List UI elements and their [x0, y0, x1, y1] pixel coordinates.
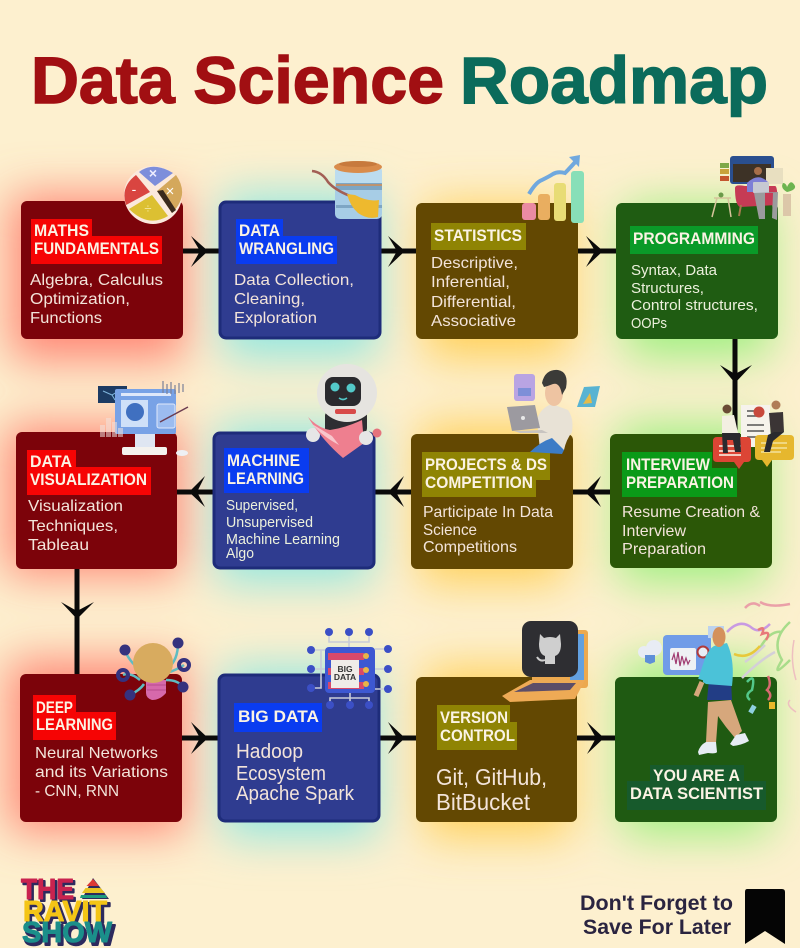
- save for later text: Don't Forget to: [580, 892, 733, 915]
- heading chip: MACHINE: [227, 452, 300, 470]
- body text: Optimization,: [30, 291, 130, 308]
- body text: [436, 764, 547, 815]
- heading chip: VERSION: [440, 709, 508, 727]
- body text: [423, 504, 553, 556]
- heading chip: [630, 226, 758, 254]
- body text: Unsupervised: [226, 514, 313, 531]
- body text: Resume Creation &: [622, 504, 760, 521]
- heading chip: YOU ARE A: [653, 767, 740, 785]
- heading chip: LEARNING: [227, 470, 304, 488]
- panel: machine learning: [214, 433, 374, 568]
- body text: Neural Networks: [35, 745, 158, 762]
- heading chip: [33, 695, 116, 740]
- heading chip: PROGRAMMING: [633, 230, 755, 248]
- heading chip: BIG DATA: [238, 708, 319, 726]
- body text: Descriptive,: [431, 255, 518, 272]
- heading chip: [234, 703, 322, 732]
- body text: [431, 255, 518, 330]
- heading chip: [431, 223, 526, 250]
- icon: big data server: BIG: [337, 664, 353, 674]
- heading chip: PREPARATION: [626, 474, 734, 492]
- panel: data visualization: [16, 432, 177, 569]
- body text: [226, 497, 340, 562]
- logo: The Ravit Show: [21, 874, 116, 948]
- panel: maths fundamentals: [21, 201, 183, 339]
- body text: Science: [423, 522, 477, 539]
- body text: [236, 741, 355, 805]
- panel: deep learning: [20, 674, 182, 822]
- body text: [28, 498, 123, 554]
- icon: big data server: [307, 628, 392, 709]
- body text: [234, 272, 354, 327]
- heading chip: CONTROL: [440, 727, 515, 745]
- heading chip: [622, 452, 737, 497]
- body text: - CNN, RNN: [35, 783, 119, 800]
- heading chip: [627, 765, 766, 810]
- body text: Interview: [622, 523, 686, 540]
- heading chip: [422, 452, 550, 497]
- body text: Participate In Data: [423, 504, 553, 521]
- body text: Algebra, Calculus: [30, 272, 163, 289]
- icon: neural bulb: [118, 638, 189, 700]
- heading chip: [31, 219, 162, 264]
- icon: maths pie: -: [132, 181, 137, 197]
- panel: you are a data scientist: [615, 677, 777, 822]
- icon: robot reading book: [306, 364, 382, 458]
- body text: Git, GitHub,: [436, 764, 547, 790]
- body text: Inferential,: [431, 274, 510, 291]
- body text: Control structures,: [631, 297, 758, 314]
- icon: programmer on chair: [712, 156, 795, 220]
- icon: growth chart: [522, 155, 584, 223]
- icon: maths pie: ÷: [144, 201, 152, 216]
- body text: Visualization: [28, 498, 123, 515]
- heading chip: FUNDAMENTALS: [34, 240, 159, 258]
- body text: [35, 745, 168, 800]
- panel: programming: [616, 203, 778, 339]
- logo: The Ravit Show: THE: [23, 876, 76, 908]
- body text: Machine Learning: [226, 531, 340, 548]
- body text: Cleaning,: [234, 291, 305, 308]
- panel: data wrangling: [220, 202, 380, 338]
- body text: Apache Spark: [236, 783, 355, 805]
- icon: data visualisation monitor: [98, 381, 188, 456]
- body text: Differential,: [431, 294, 516, 311]
- body text: and its Variations: [35, 764, 168, 781]
- body text: Tableau: [28, 537, 89, 554]
- icon: maths pie: ×: [149, 165, 157, 181]
- heading chip: [437, 705, 517, 750]
- body text: Syntax, Data: [631, 262, 718, 279]
- panel: projects and DS competition: [411, 434, 573, 569]
- body text: [622, 504, 760, 558]
- panel: statistics: [416, 203, 578, 339]
- title: Data Science: [31, 43, 444, 117]
- icon: maths pie: [124, 165, 182, 224]
- body text: Techniques,: [28, 518, 118, 535]
- panel: version control: [416, 677, 577, 822]
- icon: github laptop: [502, 621, 588, 702]
- heading chip: [27, 450, 151, 495]
- panel: big data: [219, 675, 379, 821]
- body text: Associative: [431, 313, 516, 330]
- body text: Hadoop: [236, 741, 303, 763]
- heading chip: DEEP: [36, 699, 73, 717]
- logo: The Ravit Show: RAVIT: [25, 898, 110, 930]
- icon: bookmark: [745, 889, 785, 944]
- body text: Exploration: [234, 310, 317, 327]
- heading chip: LEARNING: [36, 716, 113, 734]
- icon: interview scene: [713, 400, 794, 469]
- heading chip: [224, 448, 309, 493]
- icon: big data server: DATA: [334, 672, 356, 682]
- body text: Supervised,: [226, 497, 298, 514]
- title: Roadmap: [460, 43, 768, 117]
- body text: Functions: [30, 310, 102, 327]
- heading chip: DATA SCIENTIST: [630, 785, 763, 803]
- icon: scientist with confetti: [638, 602, 796, 755]
- heading chip: WRANGLING: [239, 240, 334, 258]
- save for later text: [580, 892, 733, 939]
- body text: [631, 262, 758, 332]
- logo: The Ravit Show: RAVIT: [23, 896, 107, 928]
- body text: Preparation: [622, 541, 706, 558]
- save for later text: Save For Later: [583, 916, 731, 939]
- body text: Structures,: [631, 280, 704, 297]
- heading chip: STATISTICS: [434, 227, 522, 245]
- body text: BitBucket: [436, 789, 531, 815]
- body text: Ecosystem: [236, 763, 326, 785]
- heading chip: DATA: [30, 453, 72, 471]
- body text: Competitions: [423, 539, 517, 556]
- panel: interview preparation: [610, 434, 772, 568]
- icon: maths pie: ×: [166, 183, 174, 200]
- heading chip: INTERVIEW: [626, 456, 710, 474]
- heading chip: MATHS: [34, 222, 89, 240]
- icon: person with laptop: [507, 370, 600, 454]
- title: [31, 43, 768, 117]
- body text: Data Collection,: [234, 272, 354, 289]
- heading chip: [236, 219, 337, 264]
- heading chip: PROJECTS & DS: [425, 456, 547, 474]
- logo: The Ravit Show: THE: [21, 874, 74, 906]
- body text: [30, 272, 163, 327]
- heading chip: DATA: [239, 222, 280, 240]
- heading chip: COMPETITION: [425, 474, 533, 492]
- heading chip: VISUALIZATION: [30, 471, 147, 489]
- body text: OOPs: [631, 315, 667, 332]
- body text: Algo: [226, 545, 254, 562]
- icon: database and broom: [312, 161, 382, 219]
- arrows: connectors between steps: [61, 236, 752, 754]
